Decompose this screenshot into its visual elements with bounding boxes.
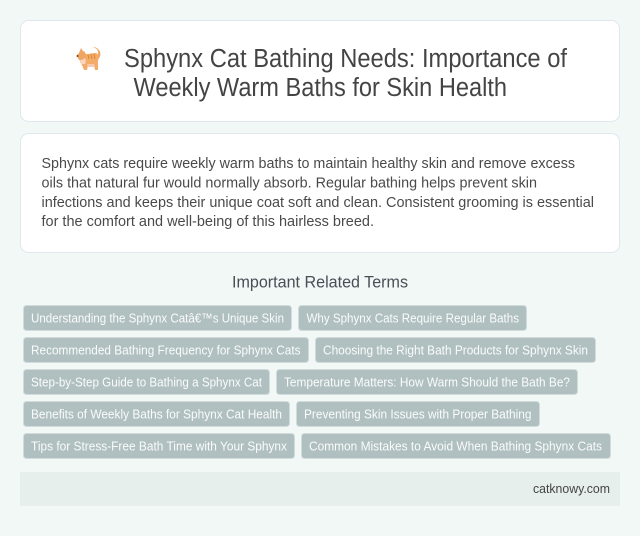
tag: [24, 370, 270, 394]
tag: Understanding the Sphynx Catâ€™s Unique Skin: [31, 310, 284, 326]
text block: description: oils that natural fur would normally absorb. Regular bathing helps prevent skin: [42, 174, 537, 192]
panel: title: [20, 20, 620, 122]
tag: Recommended Bathing Frequency for Sphynx Cats: [31, 342, 301, 358]
tag: Benefits of Weekly Baths for Sphynx Cat Health: [31, 406, 282, 422]
tag: [302, 434, 610, 458]
panel: related term tags: [24, 306, 610, 458]
tag: [24, 402, 290, 426]
tag: [276, 370, 578, 394]
text block: description: Sphynx cats require weekly warm baths to maintain healthy skin and remove excess: [42, 155, 575, 172]
tag: Preventing Skin Issues with Proper Bathing: [304, 406, 532, 422]
text block: description: for the comfort and well-being of this hairless breed.: [42, 213, 374, 230]
tag: Why Sphynx Cats Require Regular Baths: [306, 310, 519, 326]
tag: Common Mistakes to Avoid When Bathing Sphynx Cats: [309, 438, 602, 454]
tag: [24, 434, 294, 458]
tag: Choosing the Right Bath Products for Sphynx Skin: [323, 342, 588, 358]
panel: description: [20, 134, 620, 252]
heading: related terms: Important Related Terms: [232, 274, 408, 292]
tag: [24, 338, 308, 362]
text block: description: [42, 155, 594, 230]
heading: Sphynx Cat Bathing Needs: Importance of: [124, 45, 568, 73]
heading: Weekly Warm Baths for Skin Health: [134, 74, 507, 102]
footer: catknowy.com: [533, 481, 610, 496]
heading: [124, 45, 568, 102]
tag: [316, 338, 596, 362]
tag: [296, 402, 540, 426]
tag: Step-by-Step Guide to Bathing a Sphynx Cat: [31, 374, 262, 390]
tag: [298, 306, 526, 330]
icon: cat: [76, 47, 100, 70]
text block: description: infections and keeps their unique coat soft and clean. Consistent grooming is essential: [42, 194, 594, 211]
tag: [24, 306, 292, 330]
tag: Tips for Stress-Free Bath Time with Your Sphynx: [31, 438, 287, 454]
tag: Temperature Matters: How Warm Should the Bath Be?: [284, 374, 570, 390]
footer: [20, 472, 620, 506]
